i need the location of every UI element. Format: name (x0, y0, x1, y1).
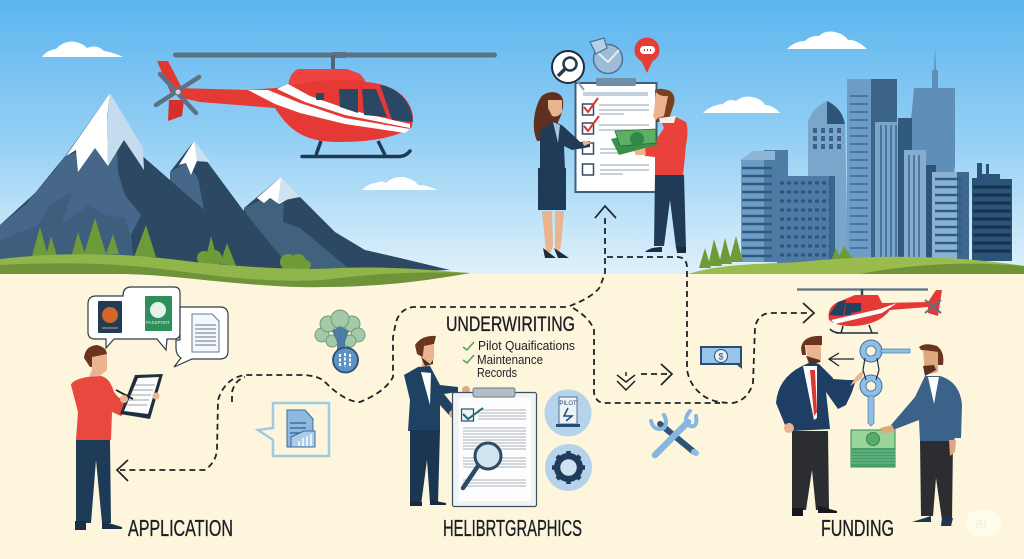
tail rotor (156, 74, 199, 113)
clock badge (590, 38, 622, 74)
label: application: APPLICATION (128, 515, 233, 541)
mountain snow caps (66, 93, 300, 204)
tail boom and body (176, 69, 413, 142)
speech bubbles: documents (88, 287, 228, 367)
sand ground background (0, 274, 1024, 559)
funding: keys (860, 340, 910, 426)
left green hill (0, 254, 470, 287)
main helicopter (156, 52, 497, 156)
mountains (0, 93, 450, 274)
figure: application man (71, 345, 163, 530)
dark passport (98, 301, 122, 333)
document bubble (174, 307, 228, 367)
icon: banknote tag (700, 346, 742, 369)
label: helibrtgraphics: HELIBRTGRAPHICS (443, 515, 582, 541)
label: funding: FUNDING (821, 515, 894, 541)
checklist text (463, 338, 575, 380)
icon: pilot badge: PILOT (559, 401, 577, 407)
clipboard (576, 83, 656, 192)
stripes on towers (850, 96, 868, 248)
cockpit windows (380, 85, 413, 122)
passport bubble (88, 287, 180, 350)
icon: pilot badge (544, 390, 592, 436)
businessman in red sweater (611, 89, 688, 253)
underwriting heading: UNDERWIRITING (446, 312, 575, 336)
small helicopter (797, 289, 942, 333)
pine trees right (699, 236, 855, 268)
rotor (173, 52, 497, 58)
funding: right businessman (880, 344, 962, 526)
skids (316, 141, 385, 155)
icon: document chart callout (258, 403, 329, 456)
sky background (0, 0, 1024, 275)
clipboard with magnifier (452, 388, 536, 506)
right low towers (932, 172, 964, 260)
icon: gear badge (545, 444, 592, 491)
white stripes (248, 90, 410, 133)
cloud mid left (362, 177, 437, 190)
checklist text: Records (477, 365, 517, 380)
figure: underwriter (404, 336, 470, 506)
rear towers (910, 46, 955, 260)
funding: stack of cash (851, 430, 895, 467)
checklist rows (582, 98, 649, 175)
icon: wrenches (651, 411, 696, 455)
red pin badge (634, 38, 660, 73)
cloud top right (787, 32, 867, 49)
pine trees left (32, 218, 311, 270)
cash (611, 129, 657, 155)
dashed route (120, 218, 807, 470)
right green hill (688, 257, 1024, 274)
document icon (192, 314, 219, 352)
cloud center right (703, 96, 780, 113)
icon: banknote tag: $ (718, 352, 724, 362)
watermark badge: ai (975, 515, 987, 532)
magnifier bubble (552, 51, 584, 90)
cloud top left (42, 42, 123, 57)
tail fin (157, 61, 183, 96)
left low towers (741, 159, 776, 262)
top figures group: checklist (552, 38, 660, 192)
funding: left businessman (776, 336, 864, 516)
arrowheads (117, 206, 854, 481)
icon: tree and brain badge (315, 310, 365, 372)
checklist text: Maintenance (477, 352, 543, 367)
city skyline (741, 46, 1012, 265)
checklist text: Pilot Quaifications (478, 338, 575, 353)
businesswoman (534, 92, 591, 258)
watermark badge (966, 510, 1001, 536)
bushes (197, 251, 211, 265)
tablet (120, 374, 163, 419)
green passport: PASSPORT (146, 320, 170, 325)
